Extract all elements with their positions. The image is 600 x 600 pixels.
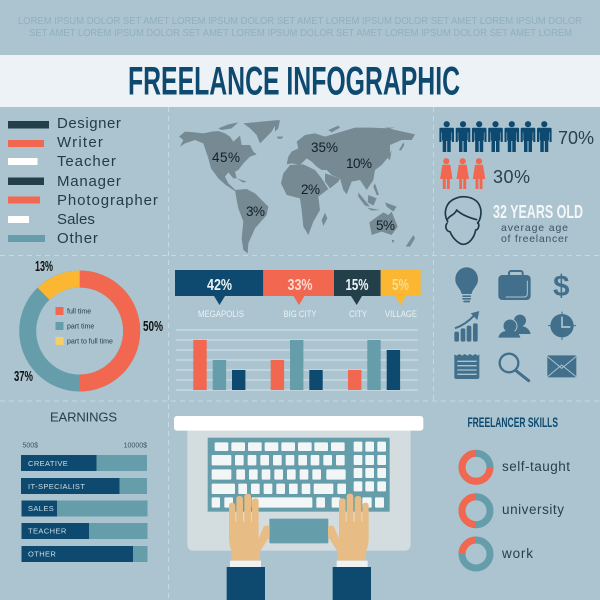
men percentage: 70% — [558, 128, 594, 148]
icon: magnifier — [500, 354, 529, 381]
legend: professions: Sales — [57, 211, 96, 228]
world map: 45% — [212, 150, 240, 165]
keyboard — [208, 438, 390, 512]
world map — [179, 120, 415, 253]
laptop with hands — [174, 416, 423, 600]
earnings panel: OTHER — [28, 550, 56, 558]
stacked percentage bar: location: 42% — [207, 277, 232, 294]
icon: people — [498, 315, 531, 338]
icon: dollar sign: $ — [553, 270, 569, 303]
world map: 10% — [346, 156, 372, 171]
icon: light bulb — [455, 267, 478, 302]
gender stats: men — [439, 121, 552, 152]
skill: self-taught — [462, 453, 570, 481]
donut chart: employment: 13% — [35, 259, 53, 275]
icon: growth chart — [454, 311, 479, 342]
icon: head outline — [445, 197, 481, 244]
earnings panel: TEACHER — [28, 526, 67, 536]
earnings panel: SALES — [28, 504, 54, 513]
title banner — [0, 55, 600, 107]
legend: professions: Other — [57, 230, 99, 247]
touchpad — [269, 519, 328, 543]
laptop screen edge — [174, 416, 423, 431]
intro text — [18, 15, 582, 39]
legend: professions: Photographer — [57, 192, 159, 209]
icon: envelope — [547, 355, 576, 377]
earnings panel: IT-SPECIALIST — [28, 482, 85, 491]
icon grid — [454, 267, 576, 381]
icon: notepad — [454, 354, 479, 379]
donut legend: full time — [67, 308, 91, 316]
gender stats: women — [440, 158, 485, 189]
right hand — [328, 494, 371, 600]
legend: professions — [8, 115, 159, 247]
donut chart: employment: 50% — [143, 319, 163, 335]
stacked percentage bar: location: MEGAPOLIS — [198, 309, 244, 320]
earnings panel: 10000$ — [124, 442, 147, 450]
skill: work — [462, 540, 533, 568]
laptop base — [187, 428, 411, 551]
earnings panel: EARNINGS — [50, 410, 117, 424]
average age text: of freelancer — [501, 233, 568, 245]
women percentage: 30% — [493, 167, 530, 187]
skill: university — [462, 497, 564, 525]
legend: professions: Manager — [57, 173, 122, 190]
skill: self-taught: self-taught — [502, 459, 570, 474]
icon: clock — [548, 312, 576, 340]
earnings panel: CREATIVE — [28, 459, 68, 468]
stacked percentage bar: location: CITY — [349, 309, 368, 320]
legend: professions: Designer — [57, 115, 122, 132]
donut chart: employment: 37% — [14, 369, 33, 385]
world map: 3% — [246, 204, 265, 219]
stacked percentage bar: location — [175, 270, 421, 320]
icon: briefcase — [498, 271, 531, 300]
average age text — [493, 202, 583, 245]
world map: 35% — [311, 140, 338, 155]
world map: 5% — [376, 218, 395, 233]
skill: university: university — [502, 502, 564, 517]
earnings panel — [21, 410, 148, 562]
stacked percentage bar: location: 5% — [392, 277, 409, 294]
left hand — [227, 494, 270, 600]
donut legend: part to full time — [67, 338, 113, 346]
stacked percentage bar: location: 33% — [288, 277, 312, 294]
stacked percentage bar: location: BIG CITY — [284, 309, 317, 320]
stacked percentage bar: location: 15% — [346, 277, 368, 294]
earnings panel: 500$ — [22, 442, 38, 450]
world map: 2% — [301, 182, 320, 197]
donut legend — [56, 307, 113, 346]
donut chart: employment — [14, 259, 163, 385]
average age text: average age — [501, 222, 568, 234]
stacked percentage bar: location: VILLAGE — [385, 309, 417, 320]
legend: professions: Writer — [57, 134, 104, 151]
donut legend: part time — [67, 324, 94, 330]
skill: work: work — [501, 546, 533, 561]
bar chart — [176, 330, 418, 390]
legend: professions: Teacher — [57, 153, 117, 170]
